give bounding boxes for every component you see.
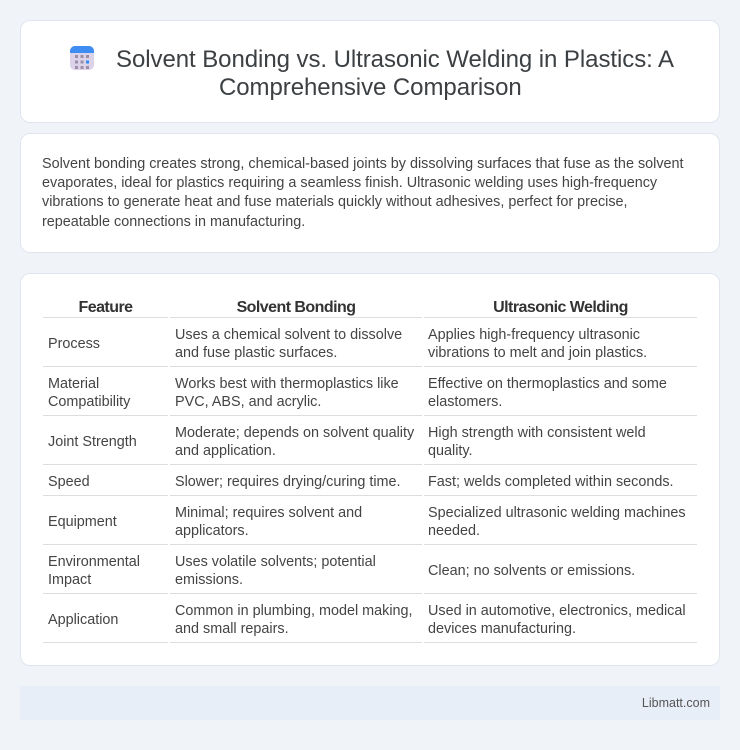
Material: ultrasonic — [428, 376, 667, 410]
Material: ultrasonic: Effective on thermoplastics and some — [428, 376, 667, 392]
title: Solvent Bonding vs. Ultrasonic Welding in Plastics: A — [116, 46, 674, 73]
title: Comprehensive Comparison — [219, 74, 522, 101]
Equipment: solvent: applicators. — [175, 523, 249, 539]
row: Speed: Speed — [48, 474, 90, 490]
summary text: vibrations to generate heat and fuse materials quickly without adhesives, perfect for precise, — [42, 194, 628, 210]
summary text: Solvent bonding creates strong, chemical-based joints by dissolving surfaces that fuse as the solvent — [42, 156, 684, 172]
column header: Feature: Feature — [79, 299, 132, 316]
Environmental Impact: solvent — [175, 554, 376, 588]
row: Material Compatibility: Compatibility — [48, 394, 130, 410]
Equipment: ultrasonic — [428, 505, 686, 539]
row: Process: Process — [48, 336, 100, 352]
Equipment: solvent: Minimal; requires solvent and — [175, 505, 362, 521]
Environmental Impact: solvent: Uses volatile solvents; potential — [175, 554, 376, 570]
row: Application: Application — [48, 612, 118, 628]
summary panel — [20, 133, 720, 253]
Environmental Impact: ultrasonic: Clean; no solvents or emissions. — [428, 563, 635, 579]
Material: ultrasonic: elastomers. — [428, 394, 502, 410]
Speed: ultrasonic: Fast; welds completed within seconds. — [428, 474, 674, 490]
Joint Strength: solvent: and application. — [175, 443, 276, 459]
Application: ultrasonic: Used in automotive, electronics, medical — [428, 603, 686, 619]
icon: calendar — [70, 46, 94, 70]
Joint Strength: ultrasonic: quality. — [428, 443, 473, 459]
Application: solvent: and small repairs. — [175, 621, 289, 637]
summary text — [42, 156, 684, 230]
Material: solvent: PVC, ABS, and acrylic. — [175, 394, 321, 410]
footer — [20, 686, 720, 720]
Process: solvent: and fuse plastic surfaces. — [175, 345, 337, 361]
Environmental Impact: solvent: emissions. — [175, 572, 243, 588]
footer credit: Libmatt.com — [642, 696, 710, 710]
header panel — [20, 20, 720, 123]
row: Material Compatibility: Material — [48, 376, 99, 392]
Joint Strength: ultrasonic: High strength with consistent weld — [428, 425, 646, 441]
Process: solvent: Uses a chemical solvent to dissolve — [175, 327, 402, 343]
Joint Strength: solvent: Moderate; depends on solvent quality — [175, 425, 414, 441]
row: Environmental Impact: Impact — [48, 572, 91, 588]
Application: ultrasonic — [428, 603, 686, 637]
Application: solvent: Common in plumbing, model making, — [175, 603, 413, 619]
summary text: repeatable connections in manufacturing. — [42, 214, 305, 230]
column header: Ultrasonic Welding: Ultrasonic Welding — [493, 299, 628, 316]
row: Equipment: Equipment — [48, 514, 117, 530]
row: Environmental Impact — [48, 554, 140, 588]
Material: solvent: Works best with thermoplastics like — [175, 376, 399, 392]
Joint Strength: solvent — [175, 425, 414, 459]
Application: solvent — [175, 603, 413, 637]
Process: ultrasonic: vibrations to melt and join plastics. — [428, 345, 647, 361]
comparison table panel — [20, 273, 720, 666]
Equipment: ultrasonic: Specialized ultrasonic welding machines — [428, 505, 686, 521]
Speed: solvent: Slower; requires drying/curing time. — [175, 474, 401, 490]
Material: solvent — [175, 376, 399, 410]
Equipment: solvent — [175, 505, 362, 539]
title — [116, 46, 674, 101]
column header: Solvent Bonding: Solvent Bonding — [237, 299, 355, 316]
Equipment: ultrasonic: needed. — [428, 523, 480, 539]
Process: ultrasonic: Applies high-frequency ultrasonic — [428, 327, 640, 343]
row: Material Compatibility — [48, 376, 130, 410]
Process: solvent — [175, 327, 402, 361]
Joint Strength: ultrasonic — [428, 425, 646, 459]
Application: ultrasonic: devices manufacturing. — [428, 621, 576, 637]
summary text: evaporates, ideal for plastics requiring a seamless finish. Ultrasonic welding uses high-frequency — [42, 175, 657, 191]
row: Environmental Impact: Environmental — [48, 554, 140, 570]
Process: ultrasonic — [428, 327, 647, 361]
row: Joint Strength: Joint Strength — [48, 434, 137, 450]
